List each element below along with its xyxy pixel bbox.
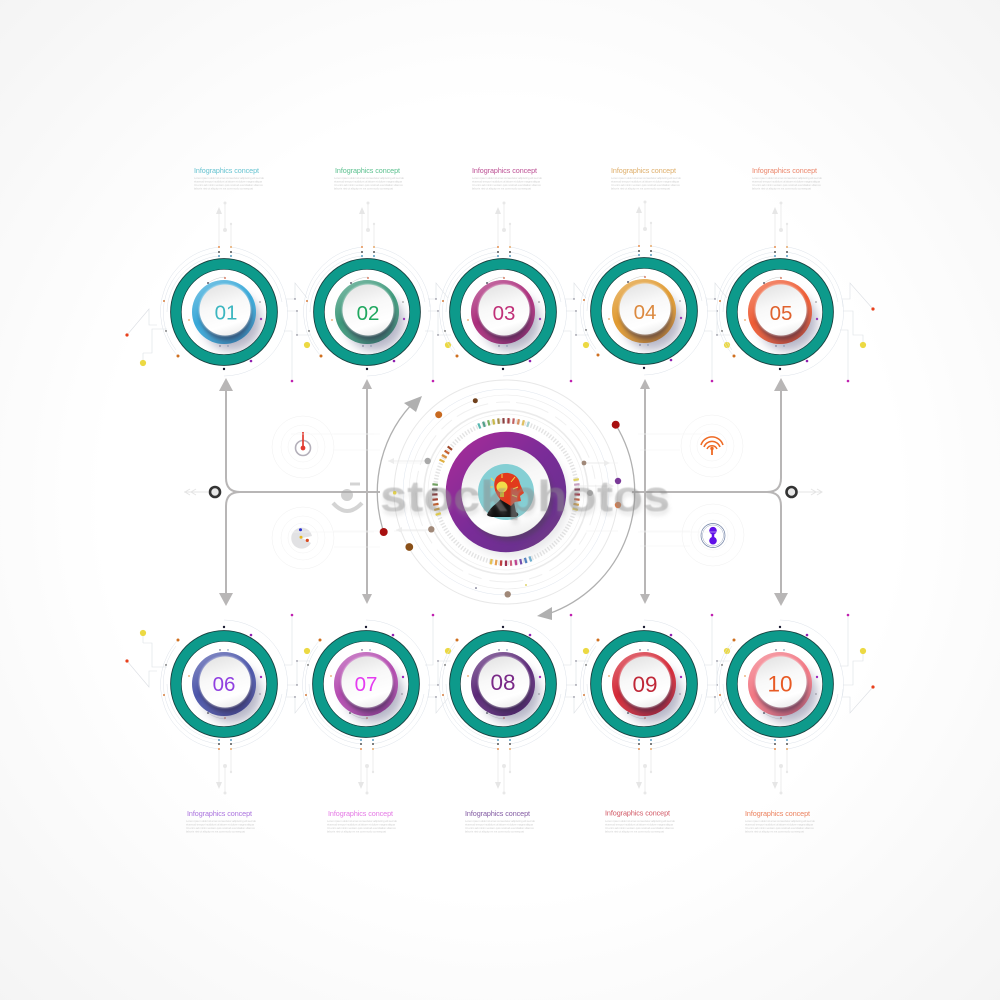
caption 05: Lorem ipsum dolor sit amet consectetur adipiscing elit sed do: [752, 176, 822, 180]
caption 07: Ut enim ad minim veniam quis nostrud exercitation ullamco: [327, 826, 396, 830]
left hub ring: [184, 487, 220, 497]
node 08: [440, 620, 567, 794]
node 09: 09: [632, 672, 658, 697]
caption 07: Lorem ipsum dolor sit amet consectetur adipiscing elit sed do: [327, 819, 397, 823]
connector arrows: [219, 378, 788, 606]
node 10: [717, 620, 844, 794]
caption 02: eiusmod tempor incididunt ut labore et dolore magna aliqua: [334, 180, 402, 184]
caption 01: Lorem ipsum dolor sit amet consectetur adipiscing elit sed do: [194, 176, 264, 180]
node 09: [581, 620, 708, 794]
node 02: 02: [357, 302, 379, 325]
caption 02: Infographics concept: [335, 166, 400, 175]
caption 08: Infographics concept: [465, 809, 530, 818]
caption 09: [605, 808, 675, 834]
node 05: [717, 202, 844, 376]
node 10: 10: [767, 672, 793, 696]
caption 03: laboris nisi ut aliquip ex ea commodo consequat: [472, 186, 531, 190]
icon: thermometer: [272, 416, 380, 478]
node 04: 04: [634, 301, 656, 324]
circuit traces: bottom row: [125, 614, 875, 713]
caption 08: [465, 809, 535, 834]
caption 09: Ut enim ad minim veniam quis nostrud exercitation ullamco: [605, 826, 674, 830]
node 03: 03: [493, 302, 515, 325]
caption 04: Infographics concept: [611, 166, 676, 175]
caption 09: eiusmod tempor incididunt ut labore et dolore magna aliqua: [605, 822, 673, 826]
node 07: 07: [355, 673, 377, 696]
caption 06: laboris nisi ut aliquip ex ea commodo consequat: [186, 830, 245, 834]
caption 03: [472, 166, 542, 190]
watermark: stockphotos: stockphotos: [380, 472, 670, 521]
central dial dots: [393, 398, 621, 598]
icon: wifi: [640, 415, 743, 477]
node 05: 05: [770, 302, 792, 325]
caption 02: [334, 166, 404, 190]
node 01: [161, 202, 288, 376]
caption 02: laboris nisi ut aliquip ex ea commodo consequat: [334, 186, 393, 190]
caption 04: Ut enim ad minim veniam quis nostrud exercitation ullamco: [611, 183, 680, 187]
caption 01: Ut enim ad minim veniam quis nostrud exercitation ullamco: [194, 183, 263, 187]
node 04: [581, 200, 708, 375]
icon: purple dots: [640, 504, 744, 566]
caption 05: Ut enim ad minim veniam quis nostrud exercitation ullamco: [752, 183, 821, 187]
caption 06: eiusmod tempor incididunt ut labore et dolore magna aliqua: [186, 822, 254, 826]
circuit traces: top row: [125, 283, 875, 382]
central ring: [453, 440, 569, 557]
caption 03: eiusmod tempor incididunt ut labore et dolore magna aliqua: [472, 180, 540, 184]
caption 01: eiusmod tempor incididunt ut labore et dolore magna aliqua: [194, 180, 262, 184]
caption 04: [611, 166, 681, 190]
caption 10: Lorem ipsum dolor sit amet consectetur adipiscing elit sed do: [745, 819, 815, 823]
caption 03: Infographics concept: [472, 166, 537, 175]
caption 06: Lorem ipsum dolor sit amet consectetur adipiscing elit sed do: [186, 819, 256, 823]
caption 05: laboris nisi ut aliquip ex ea commodo consequat: [752, 186, 811, 190]
caption 06: Ut enim ad minim veniam quis nostrud exercitation ullamco: [186, 826, 255, 830]
caption 05: Infographics concept: [752, 166, 817, 175]
caption 08: Ut enim ad minim veniam quis nostrud exercitation ullamco: [465, 826, 534, 830]
caption 05: [752, 166, 822, 190]
caption 09: Lorem ipsum dolor sit amet consectetur adipiscing elit sed do: [605, 819, 675, 823]
caption 07: laboris nisi ut aliquip ex ea commodo consequat: [327, 830, 386, 834]
caption 08: laboris nisi ut aliquip ex ea commodo consequat: [465, 830, 524, 834]
caption 06: Infographics concept: [187, 809, 252, 818]
caption 10: laboris nisi ut aliquip ex ea commodo consequat: [745, 830, 804, 834]
caption 07: Infographics concept: [328, 809, 393, 818]
watermark: stockphotos: stockphotos: [381, 476, 671, 525]
caption 09: Infographics concept: [605, 808, 670, 818]
caption 08: Lorem ipsum dolor sit amet consectetur adipiscing elit sed do: [465, 819, 535, 823]
node 06: 06: [213, 673, 235, 696]
node 02: [304, 202, 431, 376]
icon: head with light bulb: [487, 473, 524, 517]
caption 05: eiusmod tempor incididunt ut labore et dolore magna aliqua: [752, 180, 820, 184]
caption 02: Lorem ipsum dolor sit amet consectetur adipiscing elit sed do: [334, 176, 404, 180]
caption 02: Ut enim ad minim veniam quis nostrud exercitation ullamco: [334, 183, 403, 187]
caption 01: Infographics concept: [194, 166, 259, 175]
icon: pie dots: [272, 507, 380, 569]
node 07: [303, 620, 430, 794]
right hub ring: [786, 487, 822, 497]
caption 07: [327, 809, 397, 834]
caption 09: laboris nisi ut aliquip ex ea commodo consequat: [605, 830, 664, 834]
node 08: 08: [490, 670, 516, 695]
caption 04: Lorem ipsum dolor sit amet consectetur adipiscing elit sed do: [611, 176, 681, 180]
node 01: 01: [215, 302, 237, 324]
caption 04: laboris nisi ut aliquip ex ea commodo consequat: [611, 186, 670, 190]
node 03: [440, 202, 567, 376]
caption 10: Ut enim ad minim veniam quis nostrud exercitation ullamco: [745, 826, 814, 830]
caption 03: Ut enim ad minim veniam quis nostrud exercitation ullamco: [472, 183, 541, 187]
circular arrow right: [537, 421, 635, 620]
caption 08: eiusmod tempor incididunt ut labore et dolore magna aliqua: [465, 822, 533, 826]
caption 04: eiusmod tempor incididunt ut labore et dolore magna aliqua: [611, 180, 679, 184]
caption 01: [194, 166, 264, 190]
caption 10: [745, 809, 815, 834]
caption 03: Lorem ipsum dolor sit amet consectetur adipiscing elit sed do: [472, 176, 542, 180]
central circuit dial: [291, 380, 721, 604]
caption 10: Infographics concept: [745, 809, 810, 818]
caption 07: eiusmod tempor incididunt ut labore et dolore magna aliqua: [327, 822, 395, 826]
caption 01: laboris nisi ut aliquip ex ea commodo consequat: [194, 186, 253, 190]
central teal disc: [478, 464, 534, 520]
caption 06: [186, 809, 256, 834]
caption 10: eiusmod tempor incididunt ut labore et dolore magna aliqua: [745, 822, 813, 826]
node 06: [161, 620, 288, 794]
circular arrow left: [377, 396, 422, 536]
